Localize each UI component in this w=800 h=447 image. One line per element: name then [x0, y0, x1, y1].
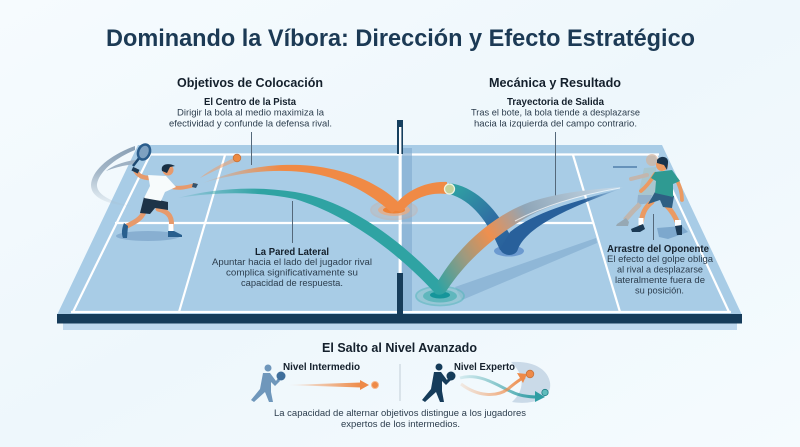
callout: Trayectoria de Salida: Trayectoria de Salida	[507, 97, 604, 108]
leader lines	[252, 132, 654, 243]
callout: Arrastre del Oponente: Arrastre del Oponente	[607, 244, 709, 255]
level: experto: Nivel Experto	[454, 362, 515, 373]
net	[397, 120, 412, 318]
callout: La Pared Lateral: La Pared Lateral	[255, 247, 329, 258]
back arm	[135, 170, 150, 178]
blue descending trajectory	[449, 183, 623, 255]
teal trajectory	[178, 189, 447, 295]
left player	[91, 141, 198, 241]
shorts	[648, 192, 674, 208]
ball: green at apex	[444, 184, 454, 194]
heading: El Salto al Nivel Avanzado: El Salto al Nivel Avanzado	[322, 340, 477, 355]
level: intermedio	[251, 362, 378, 402]
callout: Trayectoria de Salida: hacia la izquierda del campo contrario.	[474, 118, 637, 130]
head	[656, 159, 668, 171]
callout: Arrastre del Oponente: El efecto del golpe obliga	[607, 254, 714, 265]
level: experto	[422, 362, 550, 403]
callout: La Pared Lateral: capacidad de respuesta.	[241, 278, 343, 289]
callout: La Pared Lateral: Apuntar hacia el lado del jugador rival	[212, 257, 372, 268]
shorts	[140, 197, 168, 214]
arrow: straight shot	[286, 380, 378, 390]
icon: intermediate player	[251, 364, 286, 402]
title: Dominando la Víbora: Dirección y Efecto Estratégico	[106, 25, 695, 52]
legs	[127, 212, 144, 226]
callout: Arrastre del Oponente	[607, 244, 714, 296]
heading: Mecánica y Resultado: Mecánica y Resultado	[489, 75, 621, 90]
callout: Arrastre del Oponente: lateralmente fuera de	[615, 275, 705, 286]
callout: Arrastre del Oponente: su posición.	[635, 286, 684, 296]
callout: El Centro de la Pista	[169, 97, 332, 130]
conclusion text: La capacidad de alternar objetivos distingue a los jugadores	[274, 408, 526, 419]
shirt	[651, 170, 680, 197]
racket	[133, 141, 154, 166]
heading: Objetivos de Colocación: Objetivos de Colocación	[177, 75, 323, 90]
orange trajectory	[203, 165, 447, 213]
callout: El Centro de la Pista: Dirigir la bola al medio maximiza la	[177, 108, 325, 118]
callout: Trayectoria de Salida: Tras el bote, la bola tiende a desplazarse	[471, 108, 640, 118]
bounce marks	[371, 200, 524, 306]
right player	[631, 157, 688, 239]
shirt	[144, 175, 176, 201]
level: intermedio: Nivel Intermedio	[283, 362, 360, 373]
ball: orange with trail	[200, 154, 241, 178]
arms	[641, 174, 655, 191]
head	[162, 164, 174, 176]
conclusion text	[274, 408, 526, 430]
arrows: alternating shots	[460, 370, 548, 402]
callout: La Pared Lateral	[212, 247, 372, 289]
padel court	[57, 145, 742, 330]
callout: El Centro de la Pista: El Centro de la Pista	[204, 97, 296, 108]
divider	[400, 364, 401, 401]
callout: Trayectoria de Salida	[471, 97, 640, 130]
right player ghost	[613, 154, 658, 226]
legs	[641, 202, 652, 224]
callout: La Pared Lateral: complica significativamente su	[226, 268, 358, 278]
swing swoosh	[91, 146, 135, 206]
callout: Arrastre del Oponente: al rival a desplazarse	[617, 264, 703, 276]
icon: expert player	[422, 364, 456, 402]
conclusion text: expertos de los intermedios.	[341, 419, 460, 430]
callout: El Centro de la Pista: efectividad y confunde la defensa rival.	[169, 118, 332, 130]
bounce shadow	[455, 238, 597, 300]
rising trajectory	[433, 187, 623, 294]
front arm	[171, 185, 195, 188]
